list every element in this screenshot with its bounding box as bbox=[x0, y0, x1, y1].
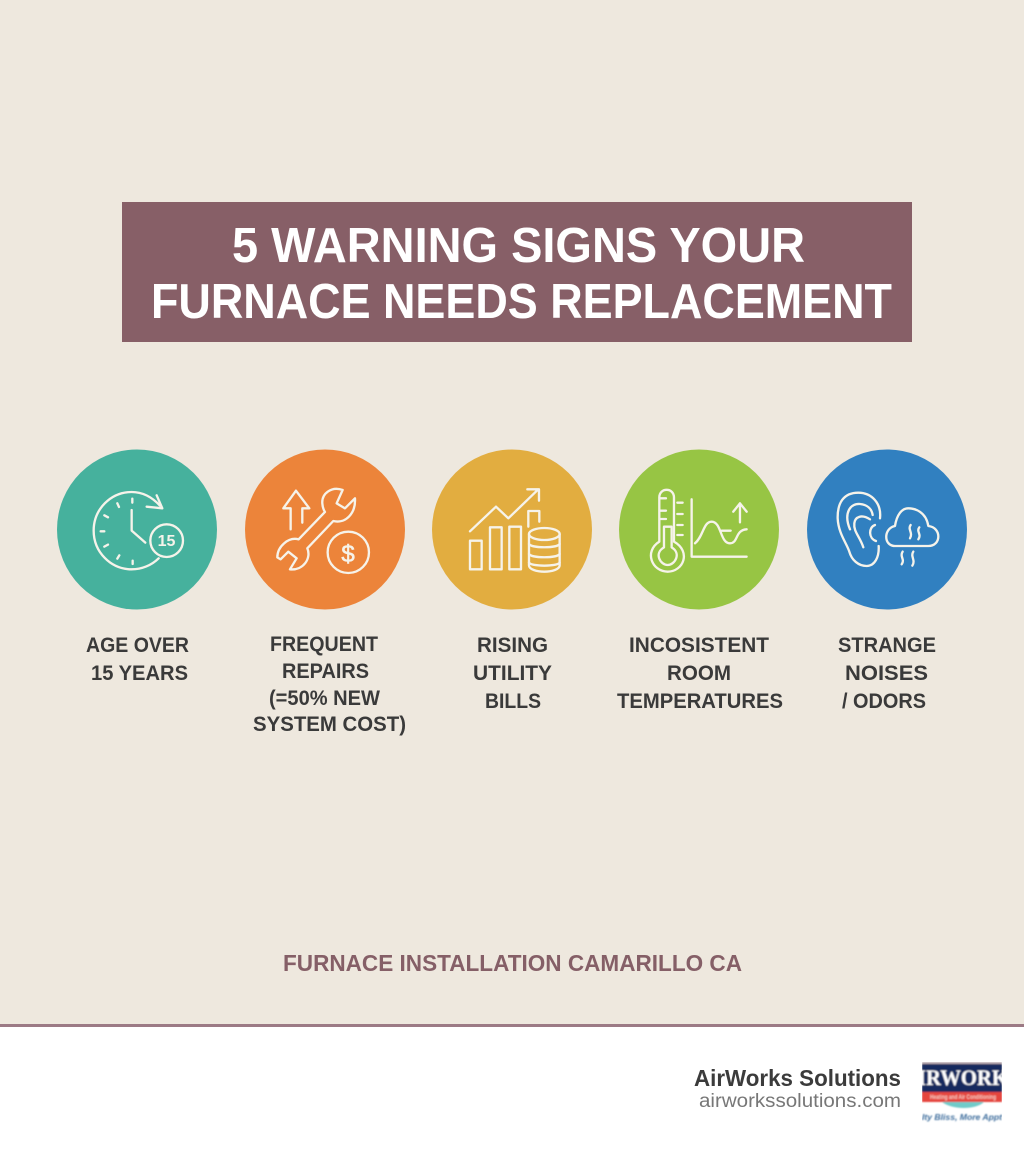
logo: IRWORK bbox=[918, 1065, 1008, 1090]
label bbox=[253, 633, 406, 736]
label: TEMPERATURES bbox=[617, 690, 783, 713]
label: ROOM bbox=[667, 662, 731, 685]
title banner bbox=[122, 202, 912, 342]
logo: Heating and Air Conditioning bbox=[930, 1095, 996, 1101]
label bbox=[617, 634, 783, 713]
label: AGE OVER bbox=[86, 634, 189, 657]
title banner: 5 WARNING SIGNS YOUR bbox=[232, 219, 805, 273]
footer panel bbox=[0, 1024, 1024, 1154]
logo: Ity Bliss, More Appt bbox=[922, 1113, 1002, 1122]
label: INCOSISTENT bbox=[629, 634, 769, 657]
label: REPAIRS bbox=[282, 660, 369, 683]
icon: wrench, arrow and dollar bbox=[245, 450, 405, 610]
icon: clock with 15 badge: 15 bbox=[158, 533, 176, 550]
label bbox=[838, 634, 936, 713]
label: UTILITY bbox=[473, 662, 552, 685]
label: (=50% NEW bbox=[269, 687, 380, 710]
title banner: FURNACE NEEDS REPLACEMENT bbox=[151, 275, 892, 329]
label: RISING bbox=[477, 634, 548, 657]
logo bbox=[922, 1062, 1002, 1122]
caption: FURNACE INSTALLATION CAMARILLO CA bbox=[283, 950, 742, 976]
label: STRANGE bbox=[838, 634, 936, 657]
brand name: AirWorks Solutions bbox=[694, 1065, 901, 1091]
icon: wrench, arrow and dollar: $ bbox=[341, 541, 355, 568]
brand url: airworkssolutions.com bbox=[699, 1091, 901, 1112]
sign 2: frequent repairs bbox=[245, 450, 406, 736]
sign 3: rising utility bills bbox=[432, 450, 592, 713]
sign 4: inconsistent room temperatures bbox=[617, 450, 783, 713]
icon: thermometer and graph bbox=[619, 450, 779, 610]
label: FREQUENT bbox=[270, 633, 378, 656]
label: SYSTEM COST) bbox=[253, 713, 406, 736]
label bbox=[473, 634, 552, 713]
sign 5: strange noises and odors bbox=[807, 450, 967, 713]
label: / ODORS bbox=[842, 690, 926, 713]
sign 1: age over 15 years bbox=[57, 450, 217, 685]
label: BILLS bbox=[485, 690, 541, 713]
icon: clock with 15 badge bbox=[57, 450, 217, 610]
label: 15 YEARS bbox=[91, 662, 188, 685]
label bbox=[86, 634, 189, 685]
icon: ear and cloud bbox=[807, 450, 967, 610]
label: NOISES bbox=[845, 662, 928, 685]
icon: bar chart and coins bbox=[432, 450, 592, 610]
